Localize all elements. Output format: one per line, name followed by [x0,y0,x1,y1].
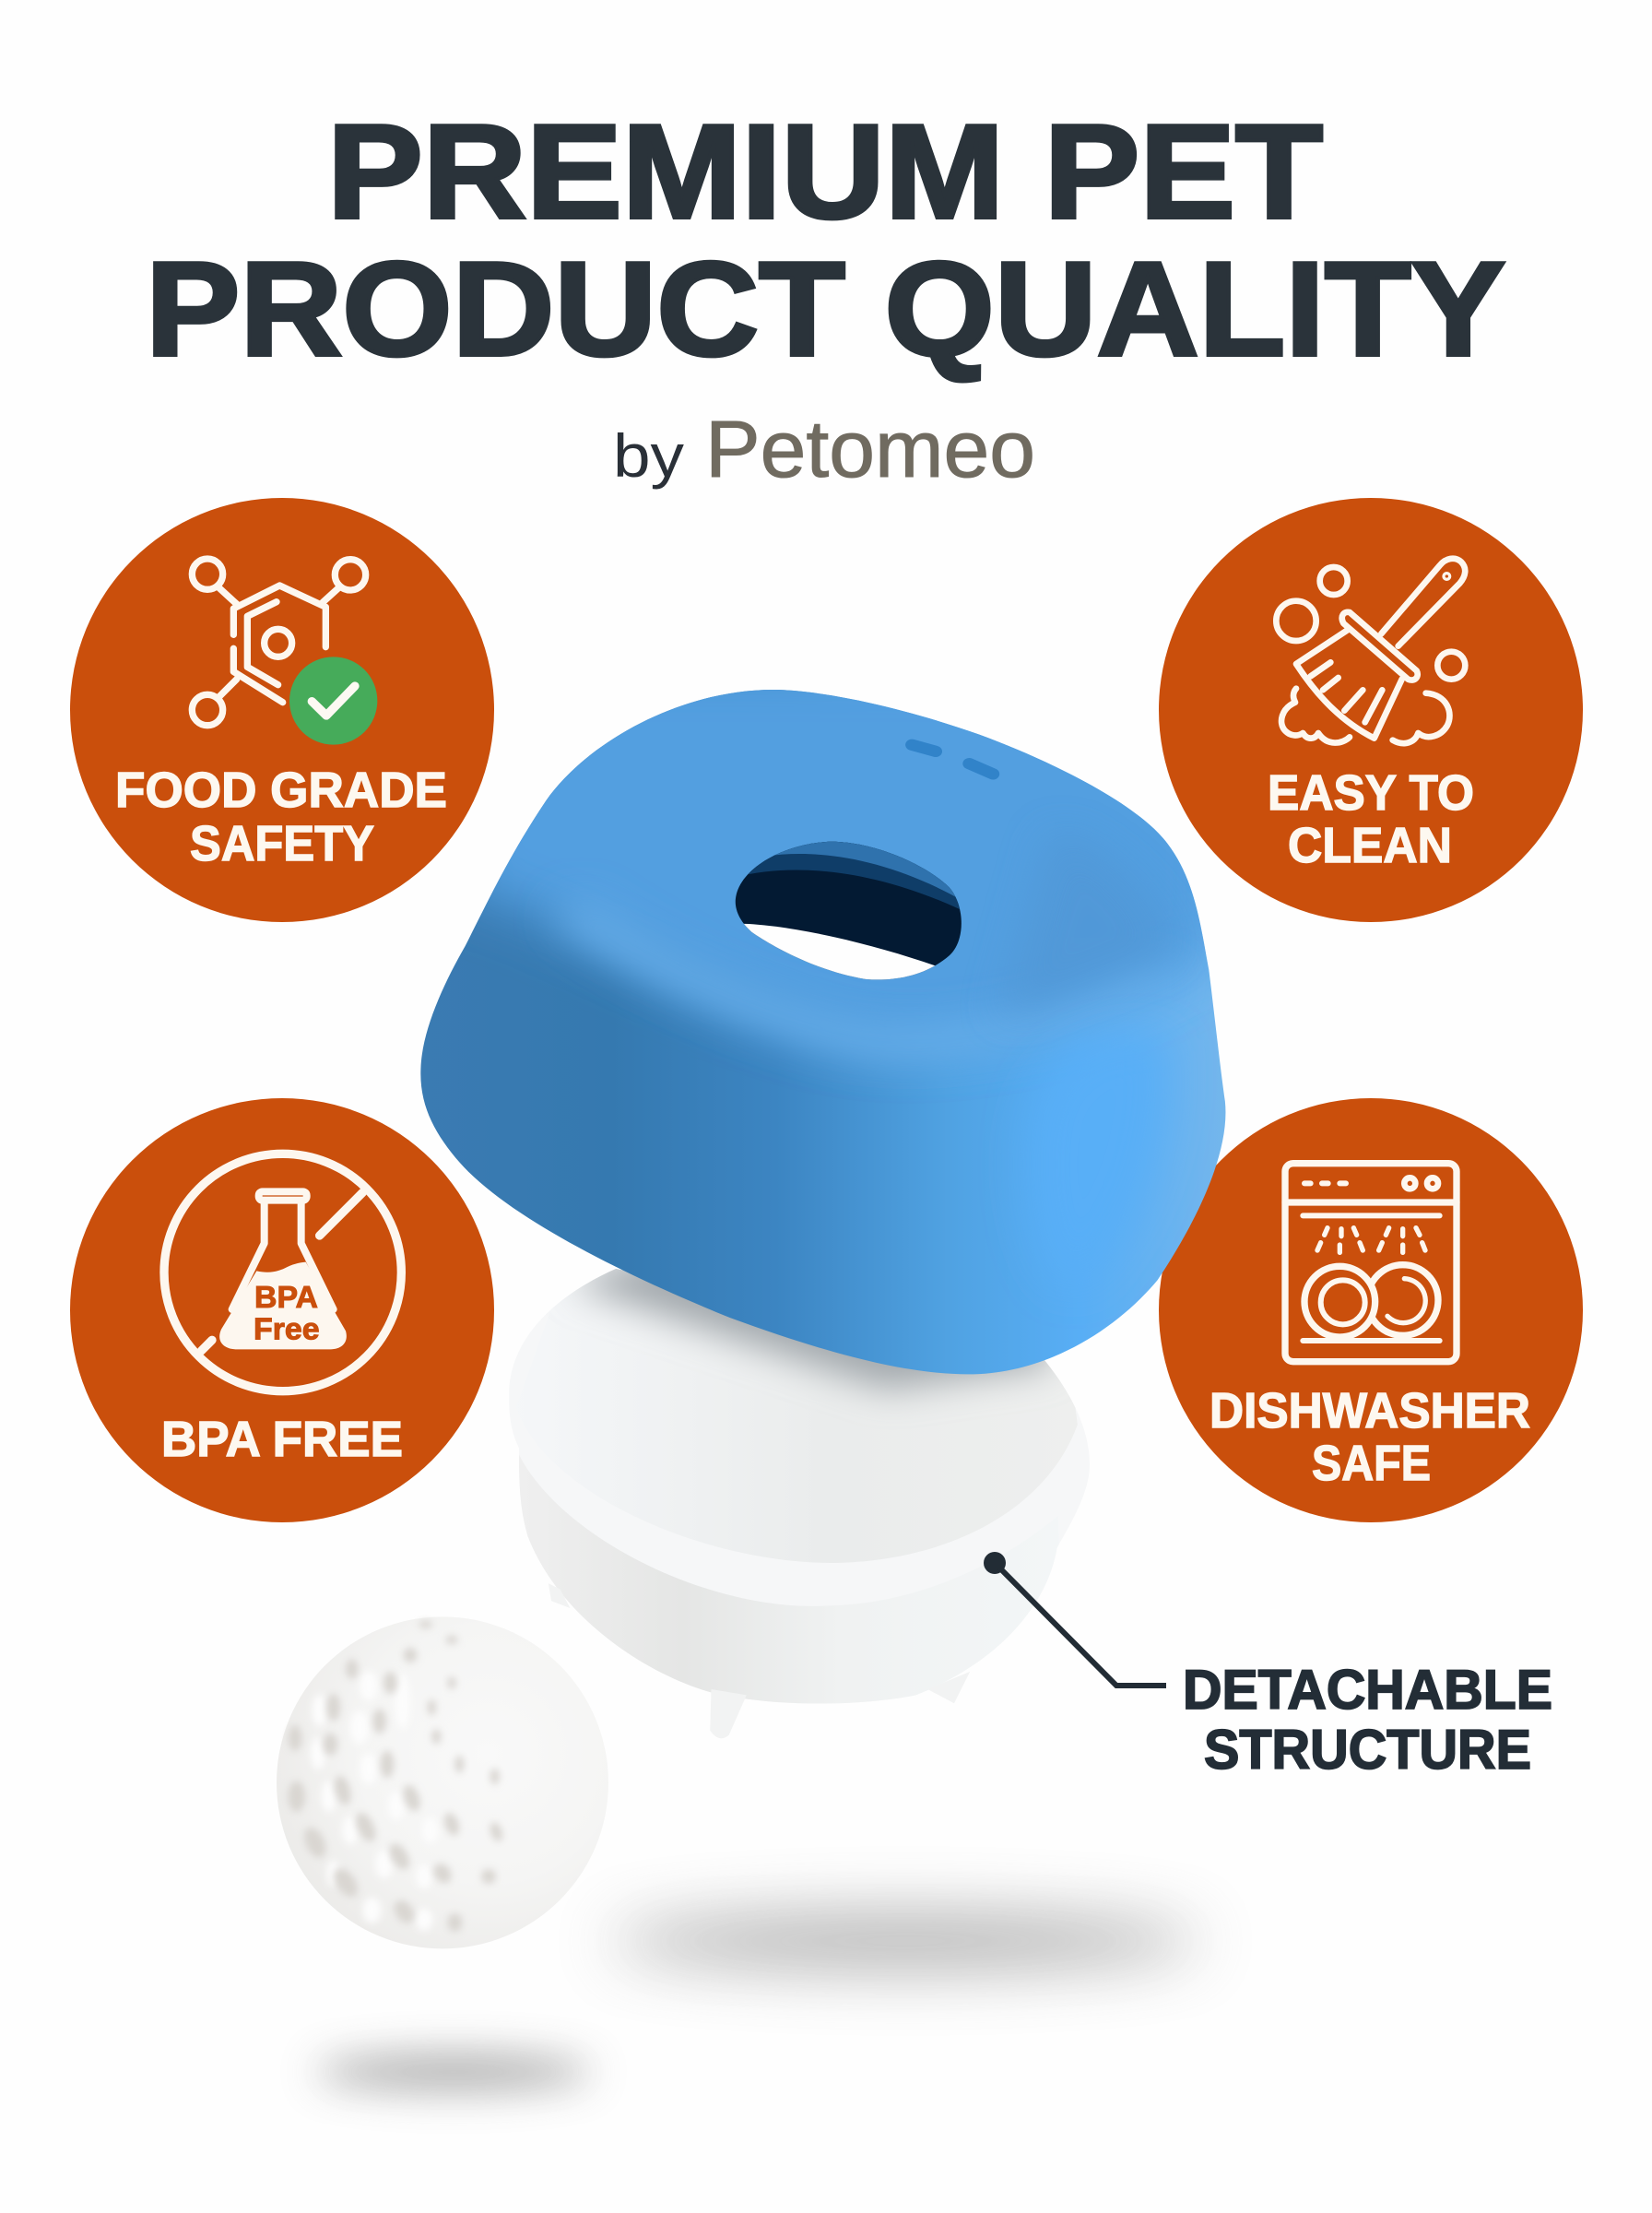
label: food grade safety: SAFETY [190,816,374,871]
panel: bpa free [70,1098,494,1522]
panel: dishwasher safe [1159,1098,1583,1522]
label: dishwasher safe [1210,1383,1530,1491]
title: PRODUCT QUALITY [146,234,1505,384]
label: dishwasher safe: DISHWASHER [1210,1383,1530,1438]
label: food grade safety [115,763,447,871]
panel: food grade safety [70,498,494,922]
icon: dishwasher [1285,1164,1457,1362]
callout text: DETACHABLE [1183,1659,1552,1721]
icon: prohibited flask [164,1154,401,1391]
label: easy to clean: CLEAN [1288,818,1452,873]
vent slots [912,745,993,774]
title: PREMIUM PET [327,97,1323,246]
bowl feet [549,1583,970,1738]
label: food grade safety: FOOD GRADE [115,763,447,818]
golf-ball textured ball [277,1616,608,1948]
brand line: by Petomeo: Petomeo [705,405,1035,494]
brand line: by Petomeo: by [613,421,684,490]
floor shadow under ball [315,2054,592,2089]
white inner bowl [499,1254,1098,1738]
panel: easy to clean [1159,498,1583,922]
callout: detachable structure [984,1552,1552,1781]
bowl opening [736,841,962,979]
label: bpa free: BPA FREE [161,1412,403,1467]
callout leader line [984,1552,1166,1686]
callout text [1183,1659,1552,1781]
icon: prohibited flask: Free [254,1312,320,1346]
label: easy to clean [1268,765,1474,873]
label: easy to clean: EASY TO [1268,765,1474,821]
label: dishwasher safe: SAFE [1312,1436,1431,1491]
blue silicone cover [420,664,1228,1374]
icon: molecule with green check [192,559,377,745]
callout text: STRUCTURE [1204,1719,1531,1781]
icon: prohibited flask: BPA [254,1281,318,1315]
floor shadow under bowl [610,1915,1200,1967]
title [146,97,1505,384]
icon: brush with bubbles [1276,559,1465,743]
